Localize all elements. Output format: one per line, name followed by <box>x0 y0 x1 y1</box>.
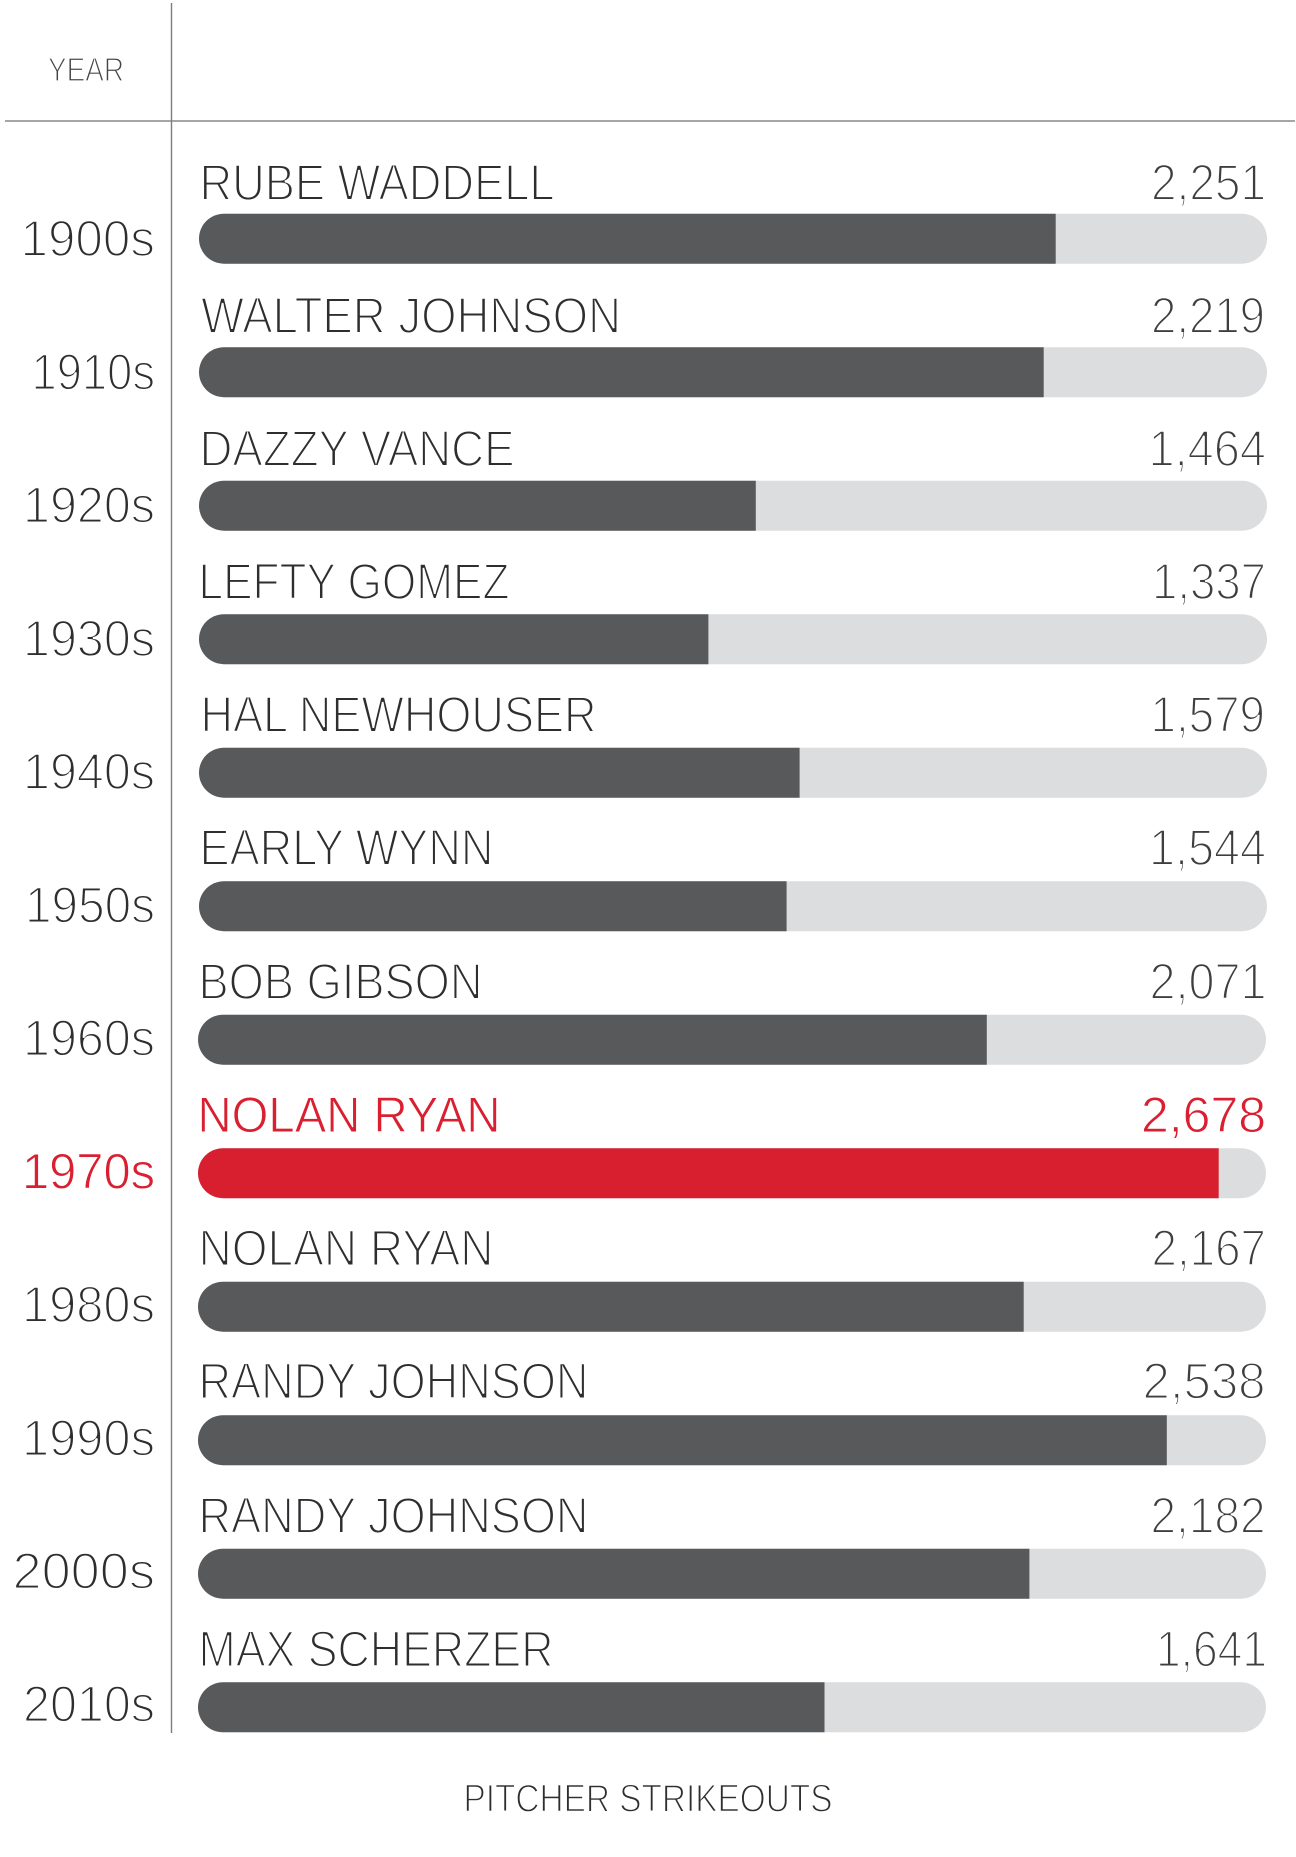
row: 2000s Randy Johnson: 2,182 <box>1150 1487 1266 1544</box>
row: 1980s Nolan Ryan: NOLAN RYAN <box>198 1219 494 1276</box>
row: 1980s Nolan Ryan <box>22 1219 1266 1333</box>
row: 1940s Hal Newhouser: HAL NEWHOUSER <box>200 686 596 743</box>
row: 1970s Nolan Ryan (highlighted): 1970s <box>22 1143 155 1200</box>
row: 1960s Bob Gibson: 2,071 <box>1150 953 1266 1010</box>
row: 2000s Randy Johnson <box>12 1487 1266 1600</box>
row: 1930s Lefty Gomez: 1930s <box>23 610 155 667</box>
row: 1990s Randy Johnson: 1990s <box>22 1410 155 1466</box>
row: 1900s Rube Waddell: RUBE WADDELL <box>200 154 554 211</box>
row: 1930s Lefty Gomez <box>23 553 1267 667</box>
row: 2000s Randy Johnson: 2000s <box>12 1542 155 1600</box>
row: 1910s Walter Johnson: 1910s <box>32 343 155 400</box>
row: 1900s Rube Waddell: 2,251 <box>1151 154 1266 211</box>
row: 2010s Max Scherzer: 1,641 <box>1156 1620 1267 1678</box>
row: 1950s Early Wynn: EARLY WYNN <box>200 819 494 876</box>
axis header: year: YEAR <box>48 51 124 88</box>
row: 1920s Dazzy Vance <box>23 420 1267 534</box>
row: 1940s Hal Newhouser: 1,579 <box>1150 686 1265 743</box>
row: 1980s Nolan Ryan: 2,167 <box>1152 1219 1266 1276</box>
row: 1920s Dazzy Vance: 1920s <box>23 476 155 534</box>
axis footer: pitcher strikeouts: PITCHER STRIKEOUTS <box>464 1778 832 1821</box>
row: 1960s Bob Gibson <box>23 953 1266 1066</box>
row: 1950s Early Wynn <box>25 819 1267 933</box>
row: 2010s Max Scherzer: MAX SCHERZER <box>198 1620 554 1678</box>
row: 1960s Bob Gibson: 1960s <box>23 1010 155 1066</box>
row: 1950s Early Wynn: 1,544 <box>1149 819 1266 876</box>
row: 1990s Randy Johnson: RANDY JOHNSON <box>198 1353 588 1410</box>
row: 1980s Nolan Ryan: 1980s <box>22 1276 155 1333</box>
row: 1970s Nolan Ryan (highlighted): NOLAN RYAN <box>198 1086 500 1143</box>
row: 1940s Hal Newhouser <box>23 686 1267 800</box>
row: 2010s Max Scherzer <box>23 1620 1267 1733</box>
row: 1910s Walter Johnson <box>32 287 1267 400</box>
row: 2010s Max Scherzer: 2010s <box>23 1676 155 1733</box>
row: 1920s Dazzy Vance: DAZZY VANCE <box>200 420 514 477</box>
row: 1920s Dazzy Vance: 1,464 <box>1148 420 1266 477</box>
row: 1990s Randy Johnson <box>22 1353 1266 1466</box>
row: 1990s Randy Johnson: 2,538 <box>1142 1353 1266 1410</box>
row: 1910s Walter Johnson: 2,219 <box>1151 287 1265 344</box>
row: 1930s Lefty Gomez: 1,337 <box>1152 553 1266 610</box>
row: 2000s Randy Johnson: RANDY JOHNSON <box>198 1487 588 1544</box>
row: 1970s Nolan Ryan (highlighted): 2,678 <box>1141 1086 1266 1143</box>
row: 1940s Hal Newhouser: 1940s <box>23 743 155 800</box>
row: 1910s Walter Johnson: WALTER JOHNSON <box>201 287 621 344</box>
row: 1900s Rube Waddell <box>20 154 1267 267</box>
row: 1900s Rube Waddell: 1900s <box>20 210 155 267</box>
row: 1960s Bob Gibson: BOB GIBSON <box>198 953 482 1010</box>
row: 1950s Early Wynn: 1950s <box>25 876 155 933</box>
row: 1930s Lefty Gomez: LEFTY GOMEZ <box>198 553 510 610</box>
row: 1970s Nolan Ryan (highlighted) <box>22 1086 1266 1200</box>
